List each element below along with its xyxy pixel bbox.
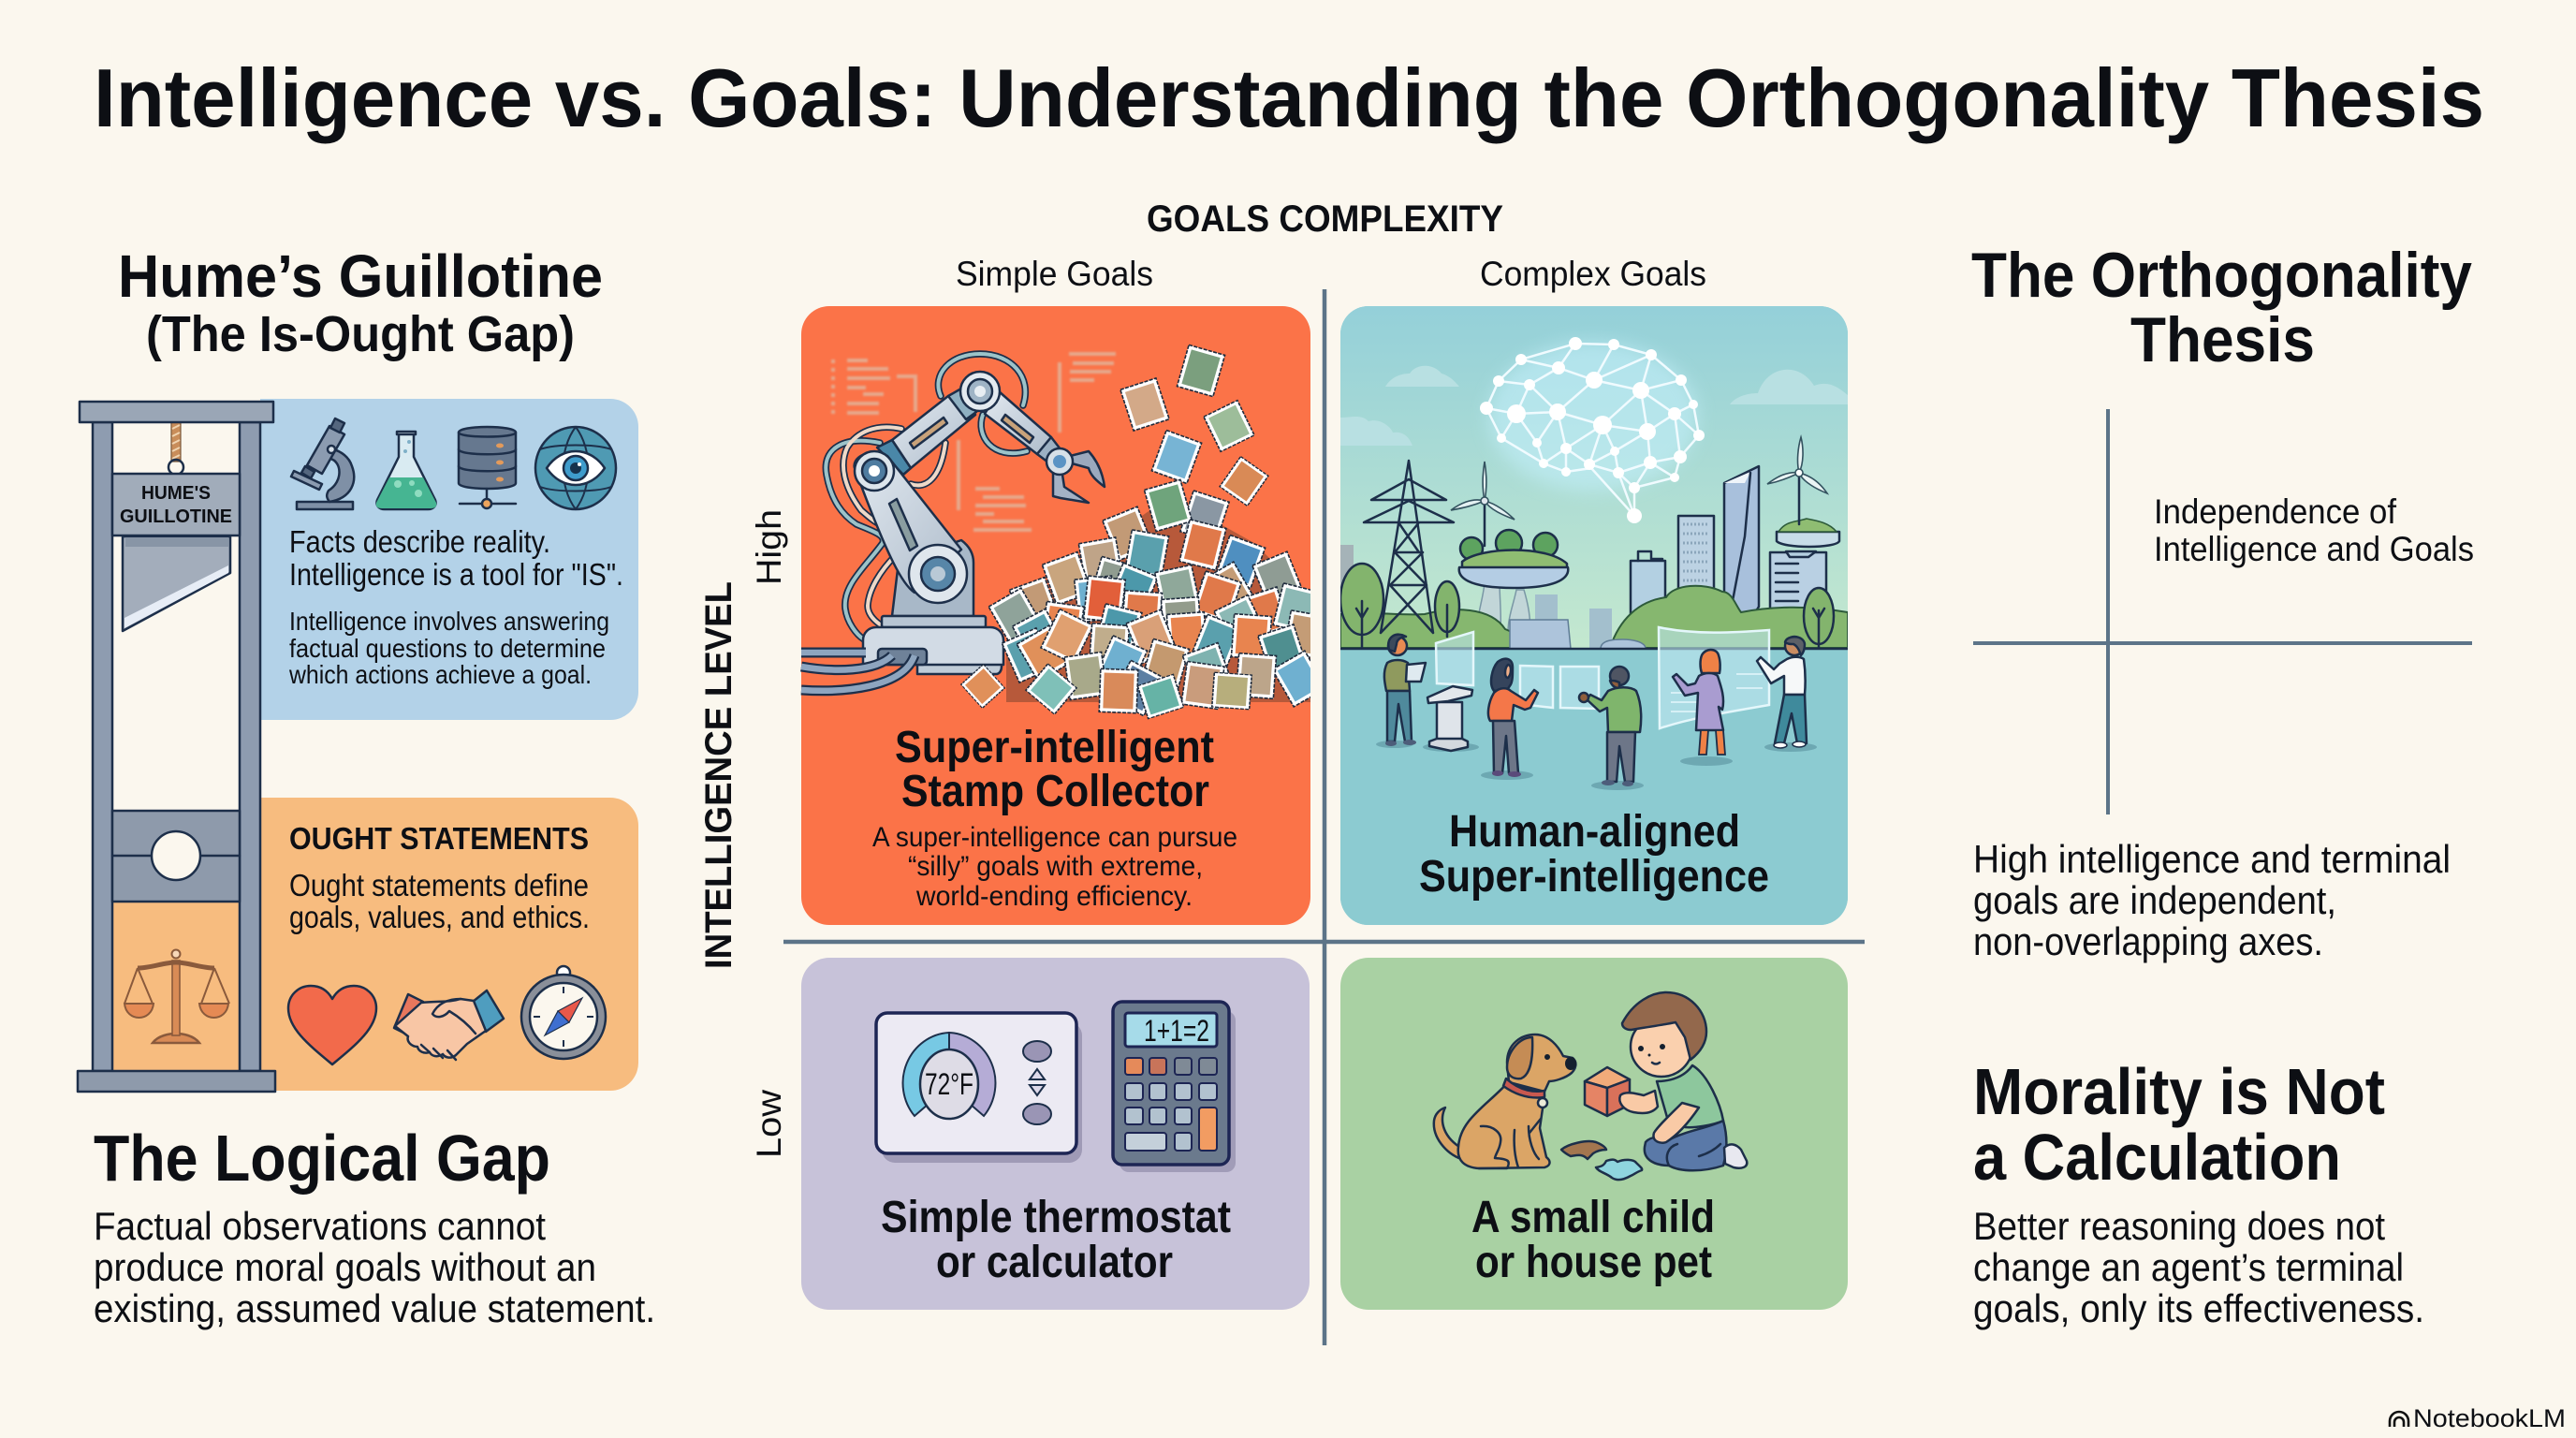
joints — [909, 545, 967, 603]
pedestal — [892, 540, 973, 616]
quadrant: child and pet — [1340, 958, 1848, 1310]
text block: morality: change an agent’s terminal — [1973, 1245, 2404, 1289]
text block: The Logical Gap: existing, assumed value statement. — [94, 1286, 655, 1330]
text: ought: OUGHT STATEMENTS — [289, 821, 589, 856]
text: thermostat — [881, 1193, 1231, 1287]
floating island — [1458, 528, 1569, 630]
text: stamp collector: world-ending efficiency. — [915, 881, 1193, 912]
icon: wind turbines — [1451, 437, 1827, 546]
hills and trees — [1340, 564, 1848, 649]
axes label: Intelligence and Goals — [2154, 530, 2474, 568]
icon: podium — [1423, 686, 1479, 752]
cables — [826, 354, 1027, 639]
lower arm — [855, 453, 961, 593]
text: facts: factual questions to determine — [289, 634, 606, 663]
sky — [1340, 306, 1848, 648]
text: child — [1471, 1193, 1715, 1287]
skyline — [1340, 466, 1839, 649]
icon: thermostat — [876, 1013, 1082, 1163]
text: ought — [289, 821, 590, 934]
text: facts: Intelligence involves answering — [289, 607, 609, 636]
logo: NotebookLM: NotebookLM — [2413, 1404, 2566, 1432]
text block: morality: Morality is Not — [1973, 1055, 2385, 1128]
text: facts: which actions achieve a goal. — [288, 660, 592, 689]
heading: Hume's Guillotine: Hume’s Guillotine — [118, 242, 603, 310]
sign: GUILLOTINE — [120, 506, 232, 527]
panel: IS facts — [260, 399, 638, 720]
pylon — [1364, 461, 1454, 633]
text: stamp collector: “silly” goals with extreme, — [908, 851, 1203, 882]
title: Intelligence vs. Goals: Understanding the Orthogonality Thesis — [94, 51, 2484, 144]
person: with tablet — [1376, 635, 1426, 748]
heading: Hume's Guillotine — [118, 242, 603, 362]
holographic screens — [1436, 627, 1769, 728]
holographic code overlays — [833, 354, 1116, 530]
person: purple dress — [1673, 650, 1733, 766]
icon: heart — [288, 986, 376, 1064]
robot arm — [801, 354, 1105, 691]
text: child: A small child — [1471, 1193, 1715, 1242]
text: facts — [288, 524, 623, 689]
text block: The Logical Gap — [94, 1122, 655, 1330]
quadrant: stamp collector — [801, 306, 1328, 925]
matrix axes — [783, 289, 1865, 1345]
gripper — [1070, 451, 1105, 487]
axes label: Independence of — [2154, 492, 2397, 531]
text block: independence: non-overlapping axes. — [1973, 919, 2323, 963]
quadrant: thermostat — [801, 958, 1310, 1310]
sign: HUME'S — [141, 483, 211, 504]
heading: Hume's Guillotine: (The Is-Ought Gap) — [146, 306, 575, 362]
icon: puzzle pieces — [1561, 1141, 1642, 1180]
icon: microscope — [291, 418, 354, 509]
icon: block — [1585, 1067, 1630, 1116]
flying stamps — [1120, 345, 1268, 506]
text block: The Logical Gap: produce moral goals without an — [94, 1245, 596, 1289]
blade — [123, 536, 230, 631]
row label: low: Low — [750, 1090, 788, 1158]
post left — [93, 422, 112, 1071]
text block: independence: goals are independent, — [1973, 878, 2336, 922]
icon: scales — [124, 949, 229, 1043]
text block: independence: High intelligence and terminal — [1973, 837, 2451, 881]
icon: calculator — [1113, 1002, 1236, 1172]
text: child: or house pet — [1475, 1238, 1712, 1287]
icon: dog — [1434, 1034, 1576, 1168]
text block: morality: a Calculation — [1973, 1121, 2341, 1194]
upper arm — [892, 396, 975, 468]
text: ought: goals, values, and ethics. — [289, 900, 590, 934]
axis title: goals complexity: GOALS COMPLEXITY — [1147, 198, 1503, 240]
clouds — [1340, 366, 1848, 446]
text block: morality: Better reasoning does not — [1973, 1204, 2385, 1248]
forearm — [985, 391, 1051, 454]
text: ought: Ought statements define — [289, 868, 589, 902]
text: facts: Intelligence is a tool for "IS". — [289, 557, 623, 592]
text block: independence — [1973, 837, 2451, 963]
text: human-aligned: Super-intelligence — [1419, 852, 1769, 902]
heading: The Orthogonality Thesis: Thesis — [2130, 304, 2315, 375]
text: stamp collector: Super-intelligent — [895, 723, 1214, 772]
text: thermostat: Simple thermostat — [881, 1193, 1231, 1242]
row label: high: High — [750, 509, 788, 585]
icon: handshake — [394, 990, 504, 1060]
icon: globe with eye — [535, 427, 616, 509]
text: thermostat: or calculator — [936, 1238, 1173, 1287]
heading: The Orthogonality Thesis — [1971, 240, 2472, 375]
guillotine — [78, 402, 275, 1092]
person: green shirt — [1579, 667, 1644, 790]
icon: flask — [376, 432, 436, 509]
text: stamp collector: A super-intelligence can pursue — [872, 822, 1237, 853]
icon: calculator: 1+1=2 — [1144, 1014, 1209, 1048]
text: stamp collector: Stamp Collector — [901, 767, 1209, 816]
quadrant: human-aligned — [1340, 306, 1848, 930]
text: human-aligned: Human-aligned — [1449, 807, 1740, 857]
icon: child — [1619, 992, 1747, 1170]
base bar — [78, 1071, 275, 1092]
text block: The Logical Gap: Factual observations cannot — [94, 1204, 546, 1248]
person: orange shirt — [1481, 659, 1538, 780]
lunette — [112, 811, 240, 902]
post right — [240, 422, 260, 1071]
axes label — [2154, 492, 2474, 568]
icon: thermostat: 72°F — [925, 1067, 973, 1101]
text block: The Logical Gap: The Logical Gap — [94, 1122, 550, 1195]
chart: orthogonal axes — [1973, 409, 2474, 814]
person: white shirt — [1757, 637, 1817, 752]
ground — [1340, 897, 1848, 925]
text: human-aligned — [1419, 807, 1769, 902]
text: stamp collector — [872, 723, 1237, 912]
top bar — [80, 402, 273, 422]
text block: morality — [1973, 1055, 2424, 1330]
rope — [168, 422, 183, 475]
stamp pile — [961, 479, 1328, 719]
axis title: intelligence level: INTELLIGENCE LEVEL — [698, 581, 739, 969]
icon: compass — [521, 966, 606, 1059]
column label: complex goals: Complex Goals — [1480, 255, 1706, 293]
panel: OUGHT statements — [112, 798, 638, 1091]
people — [1376, 635, 1817, 790]
icon: neural brain — [1480, 337, 1705, 523]
icon: database — [459, 427, 516, 508]
text: facts: Facts describe reality. — [289, 524, 550, 559]
column label: simple goals: Simple Goals — [956, 255, 1153, 293]
text block: morality: goals, only its effectiveness. — [1973, 1286, 2424, 1330]
sign — [112, 474, 240, 536]
heading: The Orthogonality Thesis: The Orthogonality — [1971, 240, 2472, 311]
